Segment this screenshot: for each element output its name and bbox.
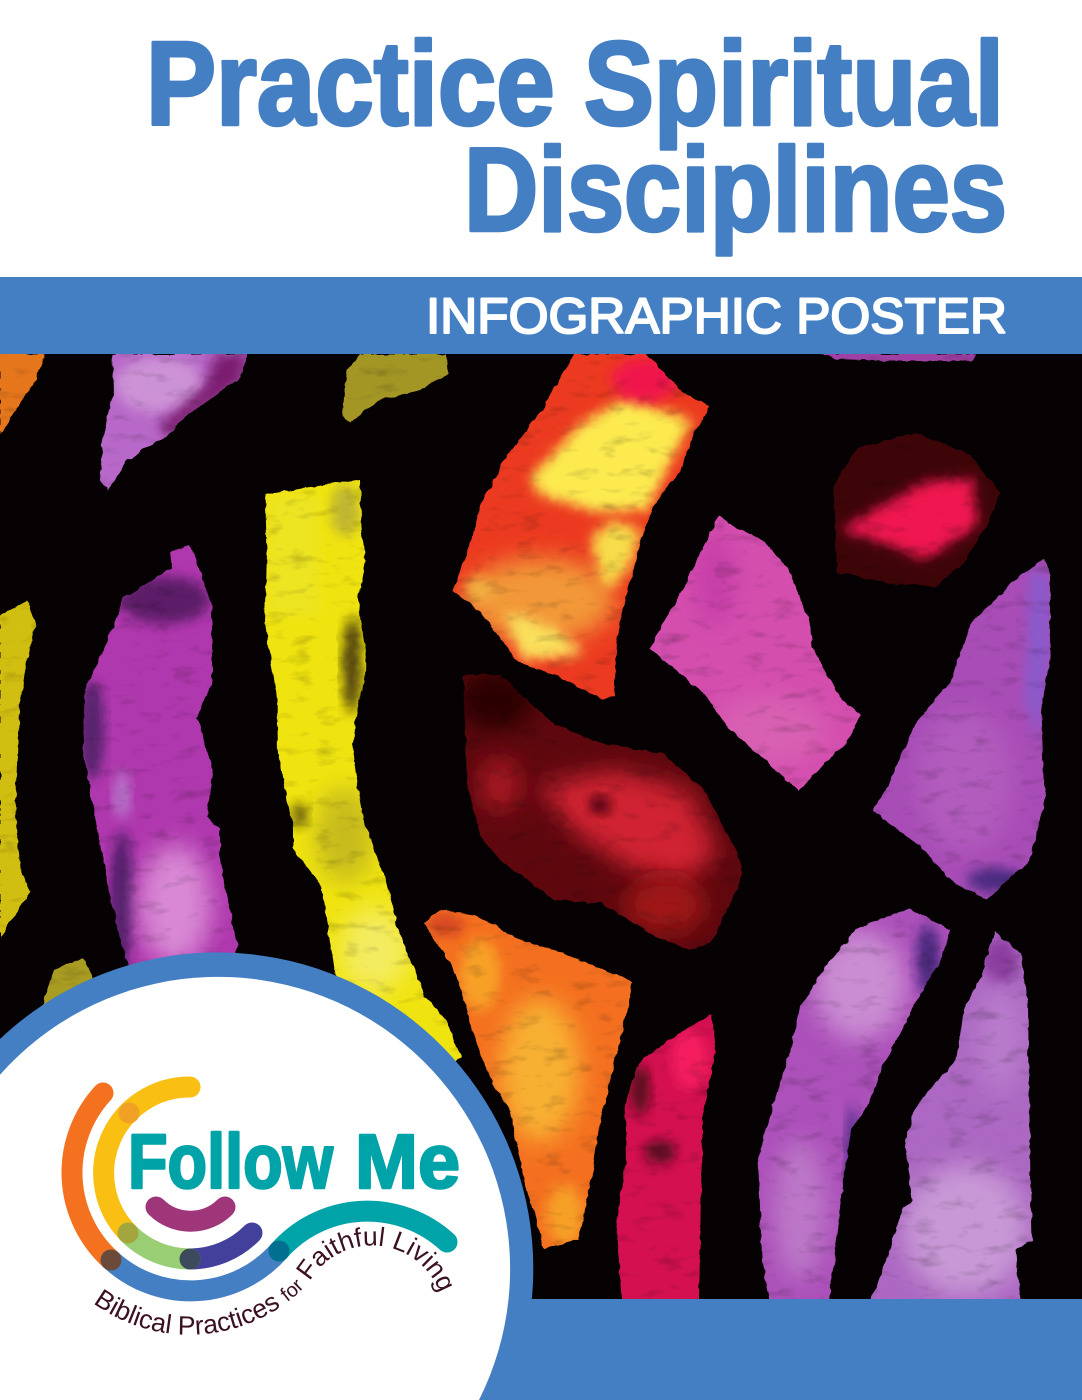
shard: orange lower bbox=[424, 910, 632, 1249]
shard: dark red with pink bbox=[833, 433, 1000, 588]
arc: green bbox=[128, 1233, 190, 1259]
shard: purple lower two bbox=[870, 931, 1033, 1299]
arc: teal bbox=[279, 1211, 447, 1251]
logo wordmark: Follow bbox=[128, 1119, 334, 1205]
arc: magenta smile bbox=[156, 1207, 225, 1221]
shard: purple lower one bbox=[758, 908, 950, 1299]
shard: purple top sliver bbox=[821, 354, 975, 361]
shard: crimson bbox=[616, 1014, 716, 1299]
arc: blue bbox=[111, 1251, 279, 1291]
subtitle: INFOGRAPHIC POSTER bbox=[426, 288, 1007, 344]
logo badge circle bbox=[0, 952, 533, 1400]
shard: purple right bbox=[872, 558, 1051, 900]
shard: orange top left bbox=[0, 354, 45, 435]
bottom blue band bbox=[0, 1299, 1082, 1400]
shard: magenta bbox=[650, 516, 861, 791]
logo wordmark: Me bbox=[355, 1119, 460, 1205]
title: Disciplines bbox=[464, 124, 1007, 256]
arc: indigo bbox=[190, 1233, 252, 1259]
shard: yellow bar bbox=[264, 480, 462, 1062]
shard: orange red bbox=[445, 354, 715, 704]
header band bbox=[0, 277, 1082, 354]
title bbox=[146, 18, 1007, 256]
shard: small yellow bbox=[41, 958, 93, 1010]
shard: yellow left bbox=[0, 601, 35, 937]
tagline: Biblical Practices for Faithful Living bbox=[94, 1226, 452, 1335]
shard: olive yellow top bbox=[343, 354, 448, 423]
shard: purple tall bbox=[82, 545, 238, 966]
shard: purple top bbox=[100, 354, 247, 490]
photo: stained glass bbox=[0, 354, 1082, 1305]
arc: orange bbox=[72, 1093, 111, 1260]
logo: Follow Me bbox=[61, 1076, 460, 1335]
arc: yellow bbox=[104, 1087, 190, 1233]
overlap dots bbox=[100, 1102, 290, 1270]
shard: red blob bbox=[462, 674, 742, 950]
